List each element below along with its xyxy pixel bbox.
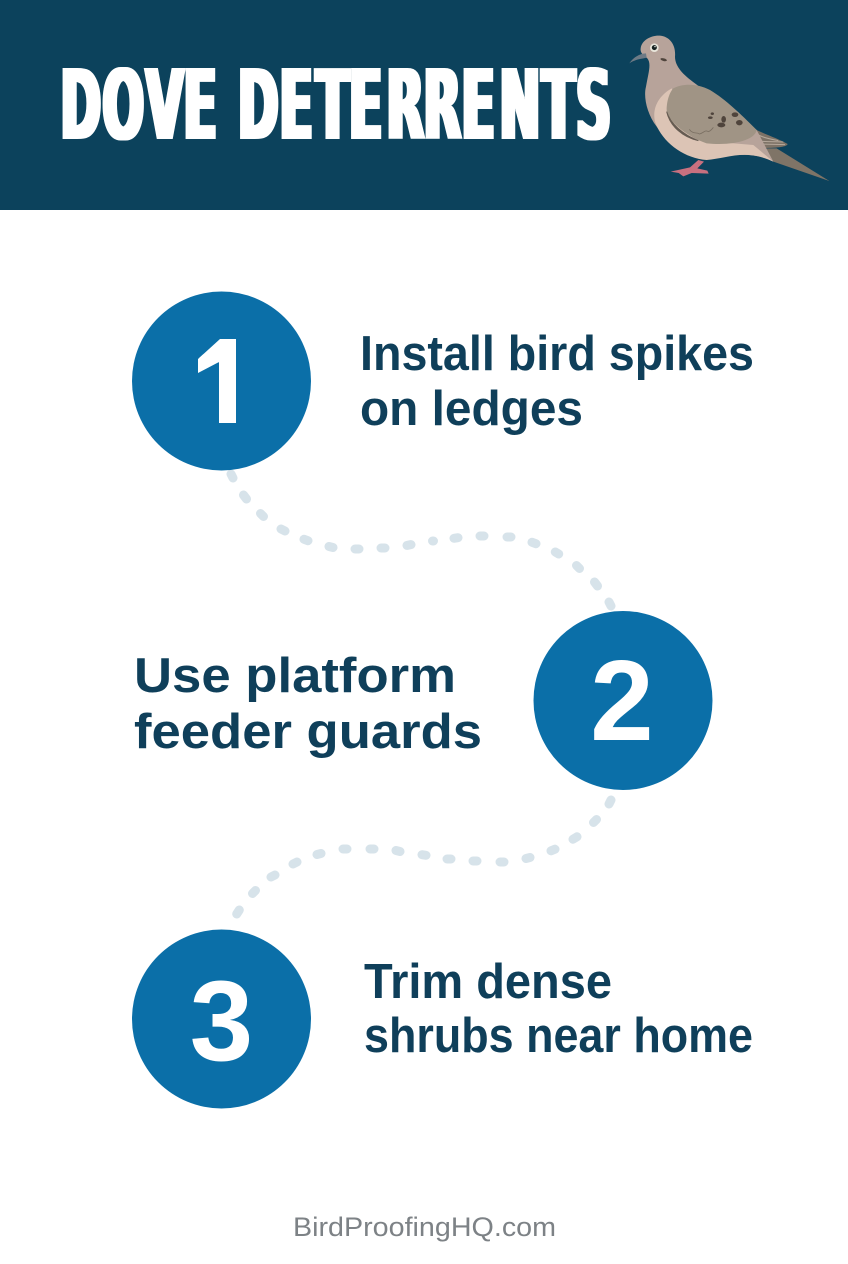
number 3: 3	[190, 958, 253, 1085]
step 2	[134, 611, 712, 790]
number badge 3	[132, 930, 311, 1108]
step 1 text: Install bird spikes	[360, 327, 754, 381]
number 1: 1	[191, 321, 255, 448]
step 2 text: Use platform	[134, 649, 456, 703]
header banner	[0, 0, 848, 210]
step 2 text	[134, 649, 482, 759]
step 2 text: feeder guards	[134, 705, 482, 759]
footer website: BirdProofingHQ.com	[293, 1212, 556, 1242]
number badge 2	[534, 611, 712, 790]
step 1 text: on ledges	[360, 382, 583, 436]
number badge 1	[132, 292, 311, 470]
step 3 text: Trim dense	[364, 955, 612, 1009]
step 3 text: shrubs near home	[364, 1009, 753, 1063]
step 1	[132, 292, 754, 470]
step 1 text	[360, 327, 754, 436]
step 3	[132, 930, 753, 1108]
dotted connector: step 2 to step 3	[237, 800, 611, 914]
number 2: 2	[590, 638, 654, 765]
title: DOVEDETERRENTS	[61, 50, 611, 163]
dotted connector: step 1 to step 2	[231, 474, 611, 606]
step 3 text	[364, 955, 753, 1063]
icon: mourning dove	[629, 36, 829, 181]
number 1	[198, 339, 236, 423]
